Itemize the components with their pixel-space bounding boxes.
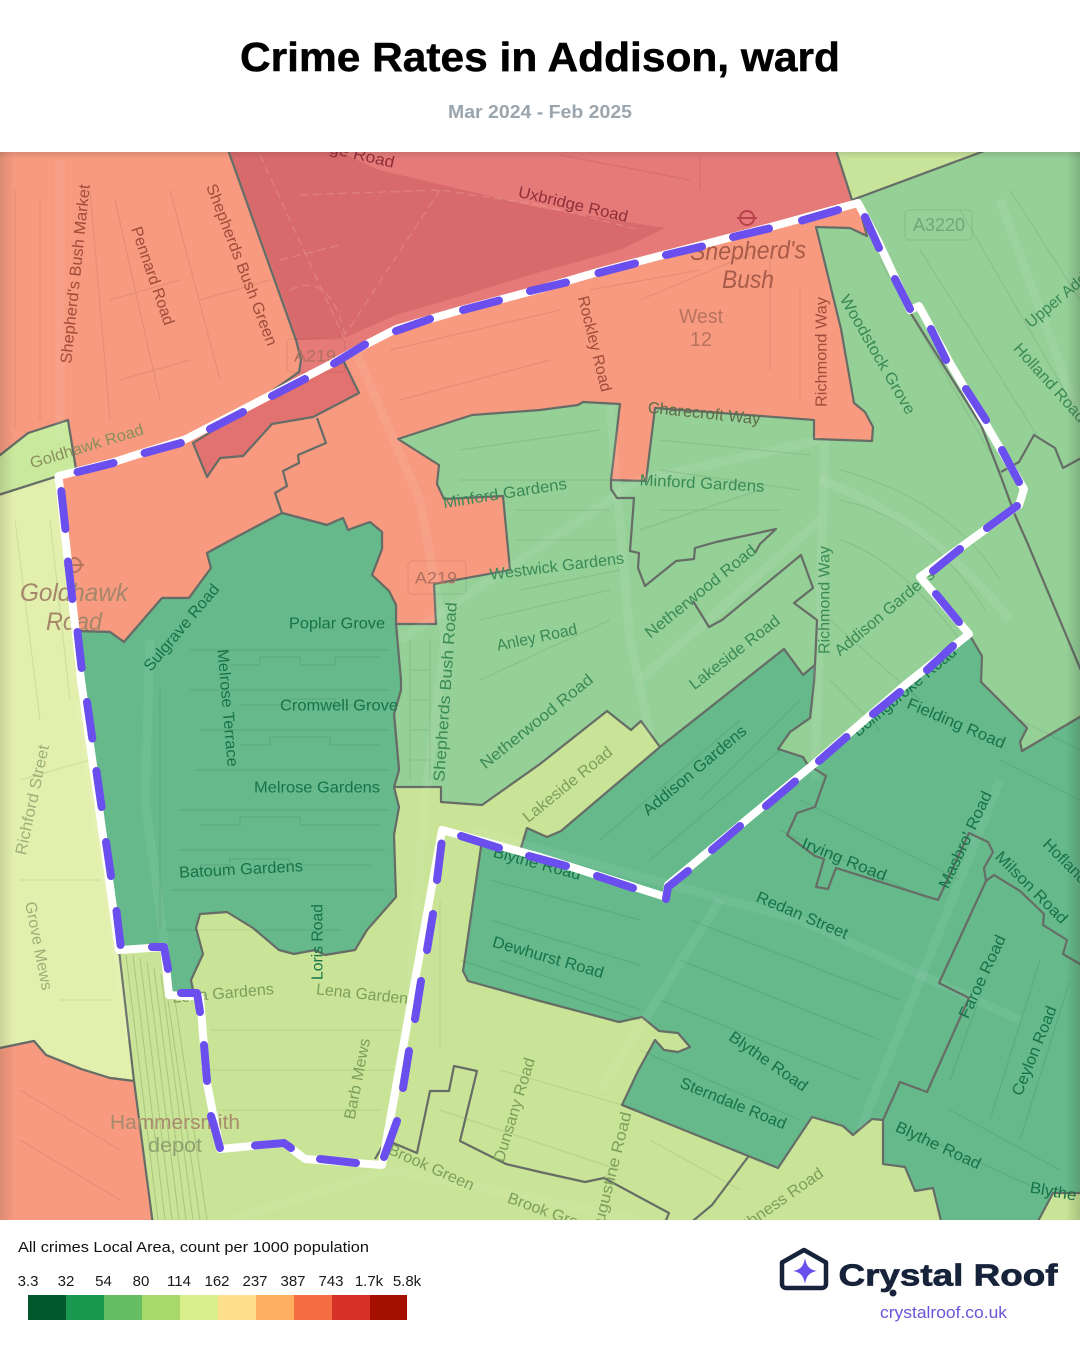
street labels: red and salmon zones — [20, 140, 830, 1157]
street labels: medium green zones: Netherwood Road — [477, 671, 597, 773]
boundary: Milson Road — [986, 875, 1080, 967]
street labels: medium green zones: Minford Gardens — [442, 476, 568, 512]
street labels: dark green zones: Irving Road — [799, 835, 889, 885]
icon: house with star — [782, 1250, 826, 1288]
legend colour bar — [28, 1295, 407, 1320]
street labels: red and salmon zones: A219 — [415, 568, 457, 588]
street labels: red and salmon zones: Shepherds Bush Green — [202, 182, 280, 348]
street labels: medium green zones: Shepherds Bush Road — [431, 602, 461, 782]
street labels: red and salmon zones: Bush — [722, 266, 774, 294]
street labels: lime zones: Lena Gardens — [315, 981, 417, 1009]
legend tick labels: 114 — [167, 1273, 191, 1290]
boundary: Irving Road — [787, 764, 993, 1120]
area: base light lime — [120, 712, 1080, 1220]
legend tick labels: 5.8k — [393, 1273, 422, 1290]
ward boundary: white casing with purple dashes — [58, 203, 1024, 1165]
street labels: dark green zones: Faroe Road — [956, 933, 1010, 1021]
street labels: dark green zones: Blythe Road — [491, 844, 583, 884]
street labels: medium green zones: Richmond Way — [816, 546, 834, 654]
street labels: dark green zones: Sulgrave Road — [141, 581, 223, 675]
street labels: red and salmon zones: West — [679, 306, 723, 328]
street labels: red and salmon zones: Road — [46, 608, 103, 636]
area: medium green centre and east — [394, 147, 1080, 805]
street labels: dark green zones: Loris Road — [310, 904, 326, 980]
street labels: red and salmon zones: Hammersmith — [110, 1112, 240, 1134]
street labels: red and salmon zones: Goldhawk — [20, 579, 129, 607]
street labels: medium green zones: Netherwood Road — [642, 542, 760, 642]
boundary: north-east branch — [1001, 435, 1080, 472]
street labels: dark green zones: Batoum Gardens — [179, 858, 303, 882]
area: park darker red — [230, 152, 665, 340]
street labels: red and salmon zones: Richmond Way — [814, 297, 830, 407]
boundary: Caithness — [692, 1156, 749, 1220]
street labels: dark green zones: Blythe Road — [893, 1119, 983, 1173]
area: salmon south-west — [0, 1041, 153, 1225]
legend tick labels: 162 — [204, 1273, 230, 1290]
street labels: dark green zones: Blythe Road — [725, 1029, 811, 1095]
legend tick labels: 743 — [318, 1273, 344, 1290]
legend tick labels: 3.3 — [18, 1273, 38, 1290]
building outlines — [15, 155, 1080, 1200]
map edge shading — [0, 152, 1080, 1220]
icon: Goldhawk Road tube roundel — [64, 558, 84, 572]
legend title: All crimes Local Area, count per 1000 population — [18, 1239, 369, 1256]
street labels: lime zones: Grove Mews — [21, 900, 55, 992]
street labels: dark green zones — [141, 581, 1080, 1212]
park paths — [260, 155, 640, 340]
street labels: lime zones: Lena Gardens — [171, 981, 275, 1007]
legend tick labels: 32 — [58, 1273, 74, 1290]
legend tick labels: 387 — [280, 1273, 306, 1290]
street labels: medium green zones: A3220 — [913, 215, 965, 235]
street labels: red and salmon zones: Uxbridge Road — [517, 184, 629, 226]
street labels: dark green zones: Fielding Road — [904, 696, 1008, 752]
street labels: red and salmon zones: 12 — [690, 329, 712, 351]
depot rail tracks — [126, 955, 207, 1220]
street labels: red and salmon zones: ge Road — [328, 140, 396, 172]
legend — [18, 1239, 422, 1320]
street labels: dark green zones: Masbro' Road — [936, 789, 996, 891]
street labels: lime zones: Lakeside Road — [520, 744, 616, 826]
legend tick labels: 80 — [133, 1273, 149, 1290]
street labels: dark green zones: Poplar Grove — [289, 616, 385, 632]
street labels: lime zones: Brook Green — [386, 1142, 476, 1194]
date range subtitle: Mar 2024 - Feb 2025 — [448, 101, 632, 122]
title: Crime Rates in Addison, ward — [240, 34, 840, 80]
area: pale lime west — [0, 476, 134, 1081]
street labels: dark green zones: Milson Road — [991, 848, 1071, 928]
street labels: dark green zones: Sterndale Road — [677, 1075, 789, 1133]
legend tick labels: 1.7k — [355, 1273, 384, 1290]
street labels: medium green zones: Lakeside Road — [686, 612, 784, 694]
street labels: dark green zones: Ceylon Road — [1009, 1004, 1061, 1098]
boundary: Lakeside enclave — [693, 555, 817, 665]
road network — [56, 160, 1022, 1130]
street labels: lime zones: Barb Mews — [342, 1037, 374, 1121]
street labels: red and salmon zones: Rockley Road — [574, 294, 614, 394]
street labels: medium green zones: Anley Road — [495, 621, 579, 655]
legend tick labels: 54 — [95, 1273, 112, 1290]
boundary: Netherwood enclave — [611, 480, 776, 586]
internal boundary lines — [275, 312, 1080, 1225]
area: lime north-west corner — [0, 420, 76, 496]
street labels: dark green zones: Melrose Gardens — [254, 780, 380, 796]
street labels: red and salmon zones: depot — [148, 1135, 202, 1157]
legend tick labels — [18, 1273, 422, 1290]
street labels: red and salmon zones: A219 — [294, 346, 336, 366]
street labels: lime zones: Caithness Road — [720, 1165, 827, 1247]
logo — [782, 1250, 1058, 1322]
street labels: medium green zones — [431, 209, 1080, 782]
logo y keyhole detail — [890, 1290, 896, 1296]
street labels: lime zones: Richford Street — [13, 743, 53, 857]
street labels: lime zones — [13, 422, 827, 1247]
street labels: dark green zones: Dewhurst Road — [490, 934, 606, 982]
area: lime north-east corner — [851, 194, 856, 198]
street labels: dark green zones: Melrose Terrace — [213, 648, 241, 768]
street labels: lime zones: Dunsany Road — [491, 1056, 539, 1164]
street labels: lime zones: Augustine Road — [589, 1110, 635, 1236]
street labels: medium green zones: Woodstock Grove — [836, 292, 918, 418]
area: red north — [227, 147, 858, 391]
road shields — [287, 210, 972, 594]
street labels: medium green zones: Westwick Gardens — [489, 550, 625, 584]
street labels: dark green zones: Bolingbroke Road — [850, 644, 960, 740]
street labels: red and salmon zones: Shepherd's — [690, 236, 806, 266]
street labels: dark green zones: Cromwell Grove — [280, 698, 398, 714]
website url: crystalroof.co.uk — [880, 1304, 1008, 1322]
street labels: dark green zones: Addison Gardens — [640, 723, 750, 819]
street labels: medium green zones: Minford Gardens — [639, 472, 765, 496]
area: salmon central ward — [58, 203, 873, 642]
street labels: lime zones: Goldhawk Road — [28, 422, 146, 472]
street labels: red and salmon zones: Shepherd's Bush Market — [58, 183, 94, 364]
area: dark green south-east — [463, 634, 1080, 1225]
boundary: railway — [910, 312, 1080, 680]
street labels: red and salmon zones: Charecroft Way — [647, 400, 761, 428]
area: red patch by Goldhawk Road — [193, 362, 359, 477]
street labels: medium green zones: Addison Gardens — [832, 566, 938, 660]
boundary: salmon inner divide — [275, 418, 326, 513]
logo wordmark: Crystal Roof — [838, 1258, 1058, 1292]
legend tick labels: 237 — [242, 1273, 268, 1290]
street labels: red and salmon zones: Pennard Road — [127, 225, 177, 327]
area: salmon north-west — [0, 147, 301, 469]
area: dark green west — [76, 513, 401, 995]
street labels: lime zones: Brook Green — [505, 1190, 597, 1237]
icon: Shepherd's Bush tube roundel — [737, 211, 757, 225]
street labels: dark green zones: Redan Street — [754, 889, 851, 943]
boundary: Brook Green — [375, 1066, 669, 1225]
